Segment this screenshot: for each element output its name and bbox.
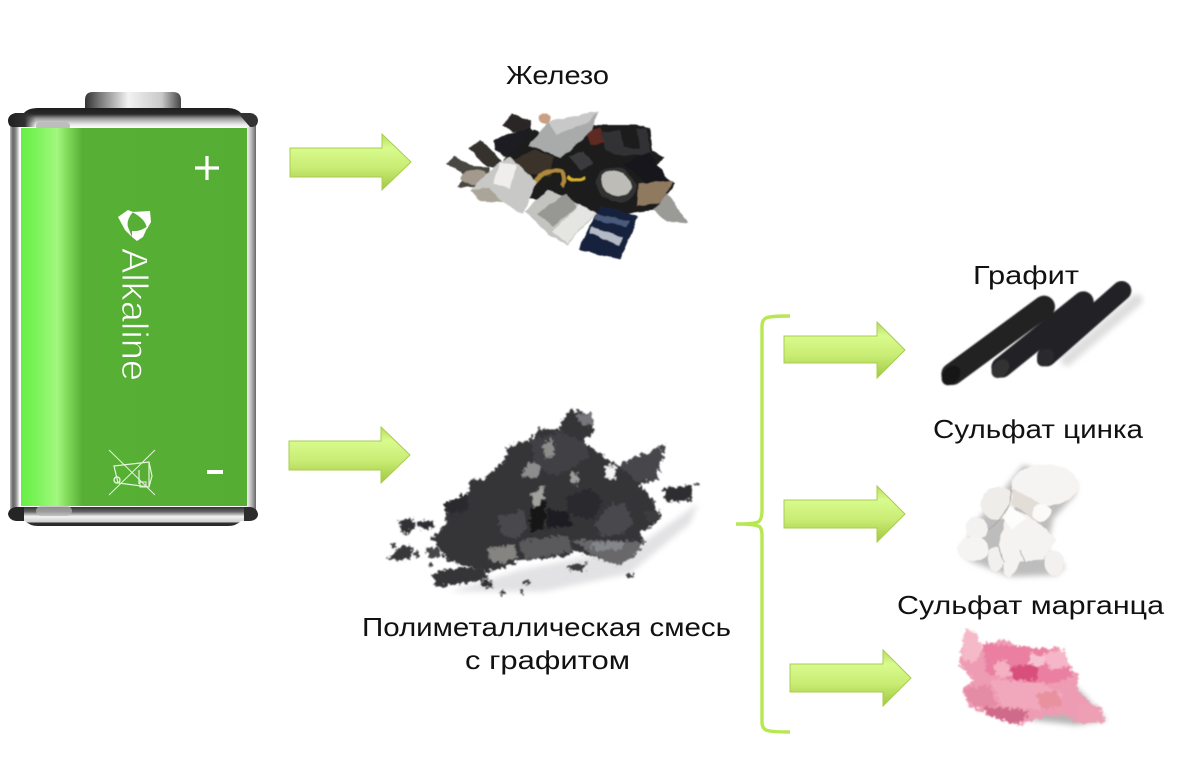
heading: zinc sulfate: Сульфат цинка — [933, 414, 1144, 444]
minus sign — [207, 470, 223, 474]
icon: crossed-out bin — [109, 450, 155, 495]
battery — [8, 92, 258, 526]
heading: graphite: Графит — [973, 260, 1079, 290]
battery top cap — [85, 92, 181, 109]
photo: manganese sulfate crystals — [958, 630, 1107, 725]
heading: polymetallic mixture: с графитом — [465, 645, 630, 675]
battery bottom rim — [8, 506, 258, 526]
icon: brand logo — [118, 210, 151, 241]
heading: manganese sulfate: Сульфат марганца — [897, 590, 1165, 620]
heading: iron: Железо — [506, 60, 609, 90]
photo: graphite rods — [938, 291, 1137, 389]
curly bracket — [736, 316, 790, 732]
plus sign — [195, 156, 219, 180]
arrow: to graphite — [784, 322, 905, 378]
arrow: to zinc sulfate — [784, 486, 905, 542]
arrow: battery to mixture — [289, 427, 410, 483]
photo: crushed iron casings — [445, 112, 688, 259]
battery top rim — [8, 108, 258, 130]
photo: zinc sulfate crystals — [957, 464, 1078, 578]
brand name: Alkaline — [114, 248, 155, 381]
battery body — [10, 122, 256, 510]
heading: polymetallic mixture: Полиметаллическая смесь — [362, 612, 731, 642]
battery green label — [21, 128, 247, 506]
photo: black polymetallic mixture — [387, 410, 700, 595]
arrow: to manganese sulfate — [790, 650, 911, 706]
arrow: battery to iron — [290, 134, 411, 190]
